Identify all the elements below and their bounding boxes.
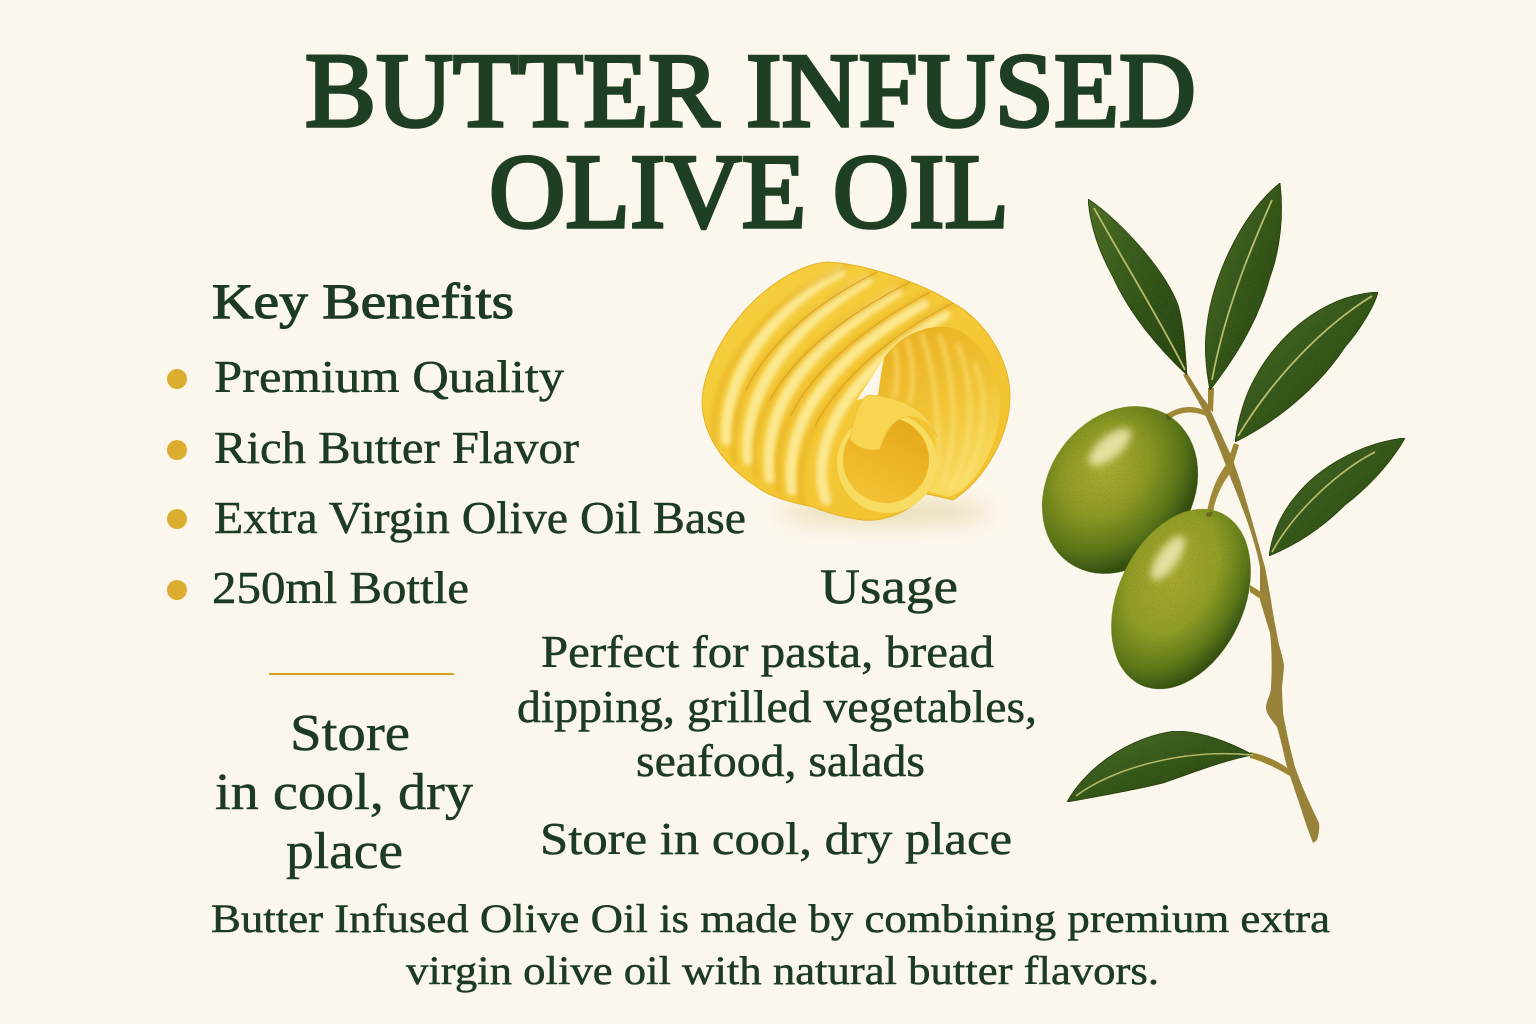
heading: usage: Usage — [820, 558, 958, 614]
title — [305, 32, 1196, 250]
title: OLIVE OIL — [489, 133, 1009, 250]
usage text: Perfect for pasta, bread — [541, 626, 994, 677]
description: Butter Infused Olive Oil is made by combining premium extra — [211, 896, 1330, 941]
usage text: seafood, salads — [636, 735, 925, 786]
leaf: lower — [1067, 731, 1253, 802]
bullet: premium quality: Premium Quality — [214, 351, 564, 402]
leaf: upper right — [1235, 292, 1378, 442]
bullet: rich butter flavor: Rich Butter Flavor — [214, 422, 579, 473]
usage text — [517, 626, 1037, 786]
leaf: top centre — [1205, 183, 1282, 390]
bullet: 250ml bottle: 250ml Bottle — [212, 562, 469, 613]
usage text: dipping, grilled vegetables, — [517, 681, 1037, 732]
description: virgin olive oil with natural butter flavors. — [406, 948, 1159, 993]
storage note: left: in cool, dry — [215, 764, 473, 821]
title: BUTTER INFUSED — [305, 32, 1196, 149]
panel: usage — [517, 558, 1037, 864]
olive: lower — [1084, 486, 1278, 712]
leaf: right — [1269, 438, 1405, 556]
branch stem — [1167, 373, 1319, 843]
storage note: left — [215, 705, 473, 880]
illustration: olive branch — [1010, 183, 1405, 843]
storage note: left: Store — [290, 705, 410, 762]
olive: upper — [1010, 376, 1230, 604]
storage note: left: place — [286, 823, 403, 880]
panel: key benefits — [167, 273, 746, 613]
description — [211, 896, 1330, 993]
bullet: extra virgin olive oil base: Extra Virgin Olive Oil Base — [214, 492, 746, 543]
heading: key benefits: Key Benefits — [212, 273, 514, 329]
icon: butter curl — [702, 262, 1010, 525]
leaf: upper left — [1088, 199, 1187, 375]
storage note: centre: Store in cool, dry place — [540, 813, 1012, 864]
